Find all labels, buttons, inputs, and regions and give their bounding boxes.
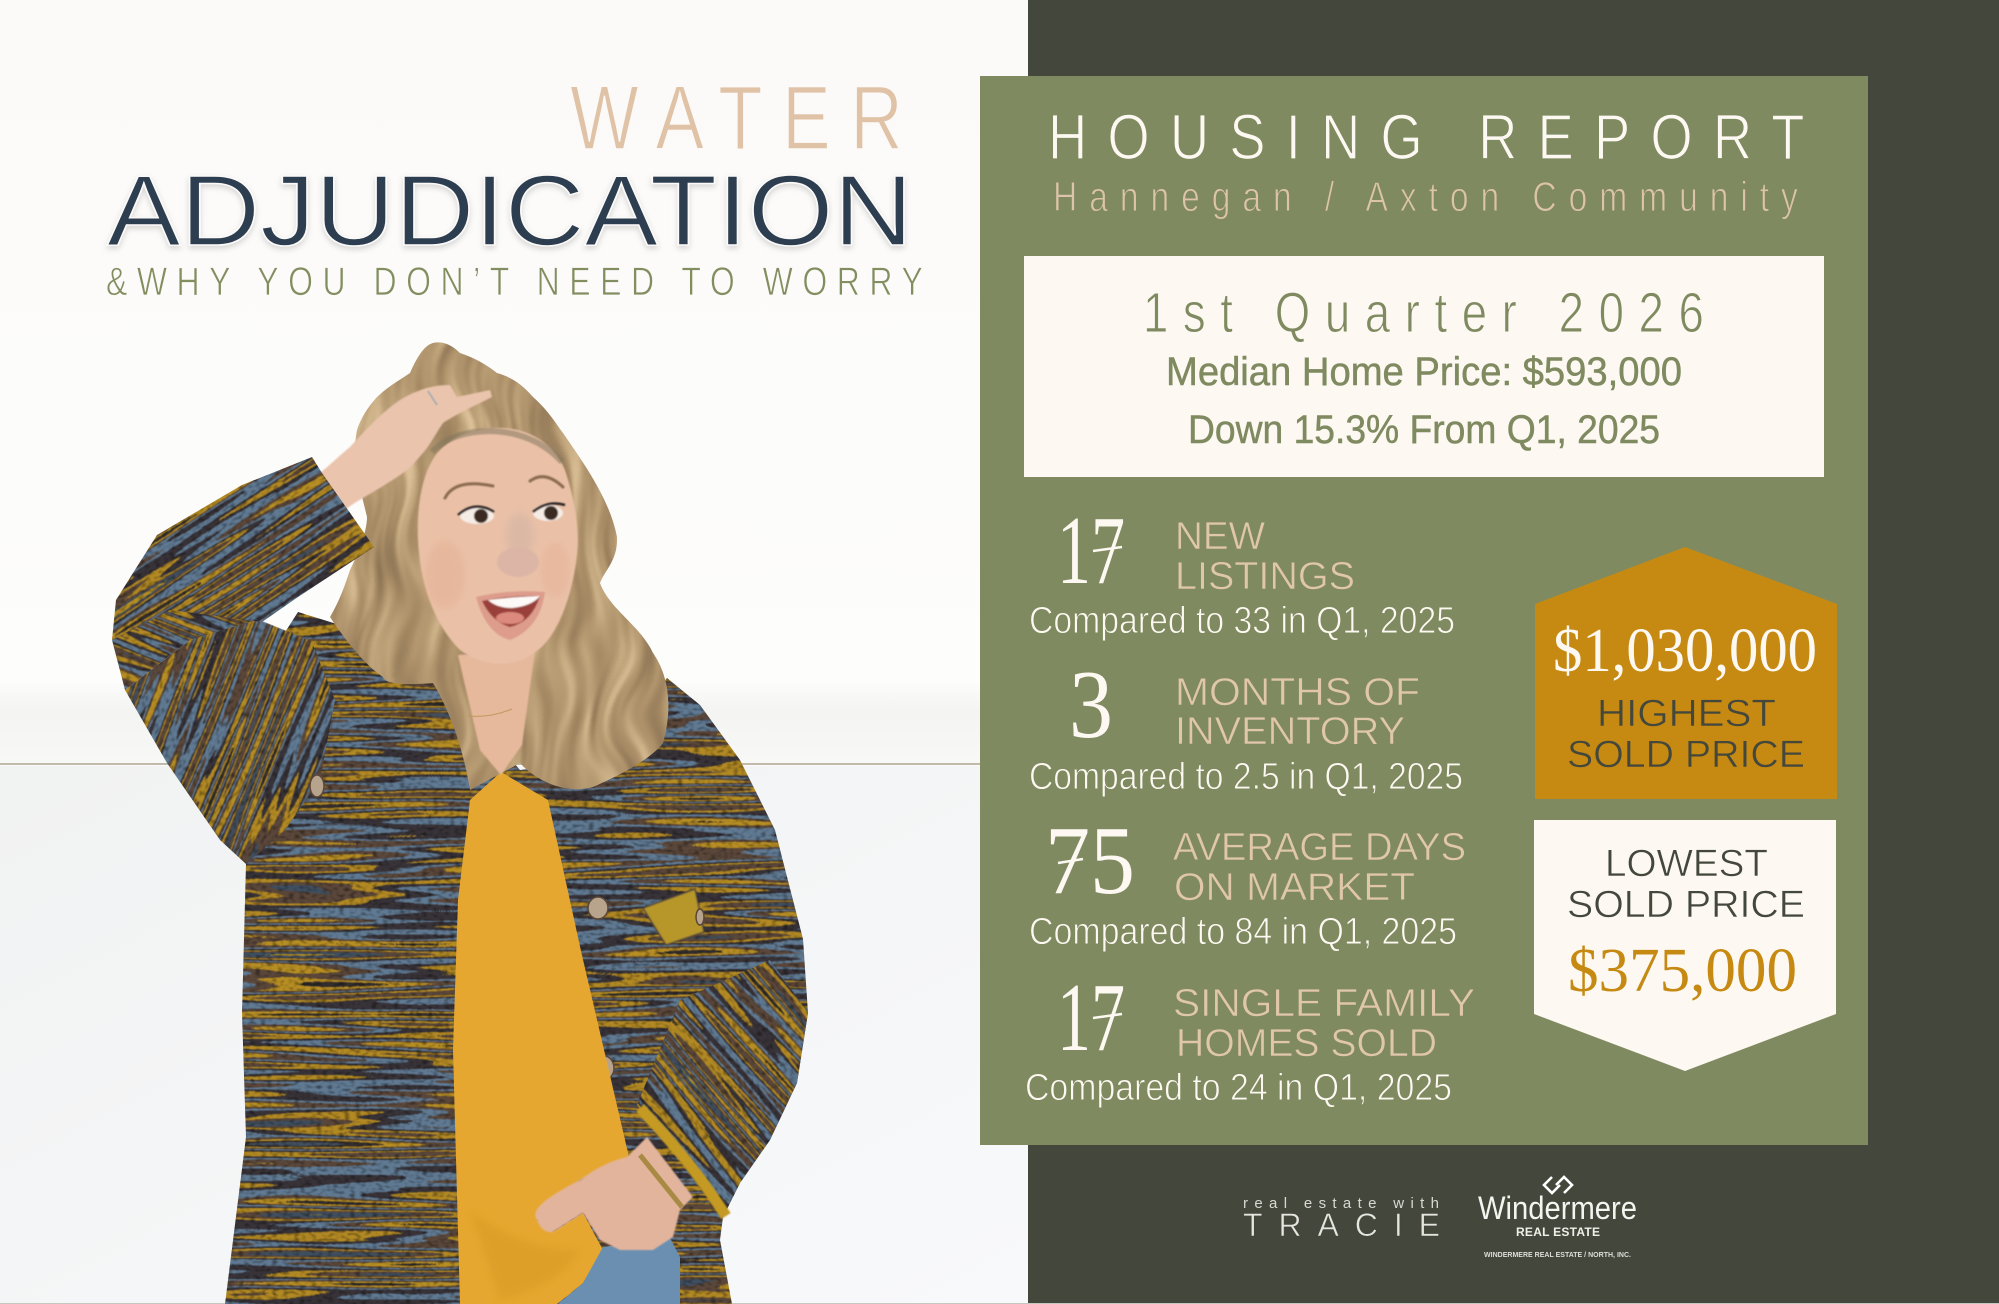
face xyxy=(418,428,578,664)
right dark background xyxy=(1028,0,1999,1304)
jacket upper sleeve xyxy=(125,620,335,864)
stat: single family homes sold: HOMES SOLD xyxy=(1176,1022,1437,1065)
yellow shirt xyxy=(453,772,629,1304)
neck and chest xyxy=(458,650,535,775)
logo: Windermere Real Estate: REAL ESTATE xyxy=(1516,1225,1600,1239)
bracelet xyxy=(640,1155,682,1207)
badge: lowest sold price: LOWEST xyxy=(1605,843,1768,885)
quarter heading: 1st Quarter 2026 xyxy=(1143,280,1704,344)
eyes xyxy=(458,504,565,524)
cheek blush xyxy=(425,513,569,609)
icon: interlocked diamonds xyxy=(1544,1177,1572,1193)
stat: single family homes sold: Compared to 24 in Q1, 2025 xyxy=(1025,1067,1452,1109)
stat: new listings: 17 xyxy=(1057,497,1125,604)
jacket forearm and cuff xyxy=(112,457,374,640)
stat: new listings: NEW xyxy=(1175,515,1265,558)
eyebrows xyxy=(445,477,563,498)
badge: lowest sold price xyxy=(1534,820,1836,1071)
stat: single family homes sold xyxy=(1025,964,1475,1109)
logo: Windermere Real Estate: WINDERMERE REAL ESTATE / NORTH, INC. xyxy=(1484,1252,1631,1259)
raised hand xyxy=(320,385,492,512)
logo: Windermere Real Estate: Windermere xyxy=(1478,1190,1637,1226)
heading: housing report: HOUSING REPORT xyxy=(1048,101,1805,173)
badge: lowest sold price: SOLD PRICE xyxy=(1567,884,1805,926)
lower hand in pocket xyxy=(535,1137,693,1250)
logo: real estate with Tracie: TRACIE xyxy=(1243,1207,1440,1243)
jeans xyxy=(558,1238,680,1304)
shirt fold shading xyxy=(470,1210,580,1300)
panel: housing report xyxy=(980,76,1868,1145)
stat: average days on market xyxy=(1029,807,1466,953)
stat: months of inventory xyxy=(1029,651,1463,798)
stat: average days on market: ON MARKET xyxy=(1174,866,1415,909)
stat: months of inventory: Compared to 2.5 in Q1, 2025 xyxy=(1029,756,1463,798)
badge: highest sold price: HIGHEST xyxy=(1597,693,1776,735)
badge: highest sold price: SOLD PRICE xyxy=(1567,734,1805,776)
left photo background xyxy=(0,0,1028,1304)
hairline shade xyxy=(432,431,562,462)
subheading: community: Hannegan / Axton Community xyxy=(1053,175,1798,221)
jacket torso xyxy=(225,612,808,1304)
buttons xyxy=(310,775,704,1080)
stat: months of inventory: 3 xyxy=(1069,651,1113,758)
subtitle: &WHY YOU DON’T NEED TO WORRY xyxy=(106,259,923,304)
ring xyxy=(428,391,437,405)
title: WATER: WATER xyxy=(570,67,903,169)
badge: lowest sold price: $375,000 xyxy=(1568,937,1797,1005)
pocket flap xyxy=(643,889,704,945)
change from last year: Down 15.3% From Q1, 2025 xyxy=(1188,408,1660,452)
stat: average days on market: 75 xyxy=(1045,807,1135,914)
stat: months of inventory: MONTHS OF xyxy=(1175,671,1420,714)
stat: average days on market: AVERAGE DAYS xyxy=(1173,826,1466,869)
stat: new listings: Compared to 33 in Q1, 2025 xyxy=(1029,600,1455,642)
title: ADJUDICATION: ADJUDICATION xyxy=(107,155,913,267)
jacket right forearm xyxy=(637,960,808,1209)
logo: Windermere Real Estate xyxy=(1478,1177,1637,1259)
stat: new listings xyxy=(1029,497,1455,642)
stat: average days on market: Compared to 84 in Q1, 2025 xyxy=(1029,911,1457,953)
right cuff band xyxy=(640,1108,726,1216)
quarter summary box xyxy=(1024,256,1824,477)
median price: Median Home Price: $593,000 xyxy=(1166,350,1682,394)
jacket elbow xyxy=(112,610,253,690)
badge: highest sold price: $1,030,000 xyxy=(1553,617,1817,685)
hair xyxy=(330,342,668,790)
badge: highest sold price xyxy=(1535,547,1837,799)
stat: months of inventory: INVENTORY xyxy=(1175,710,1405,753)
open mouth xyxy=(476,591,545,640)
stat: new listings: LISTINGS xyxy=(1175,555,1355,598)
stat: single family homes sold: SINGLE FAMILY xyxy=(1173,982,1475,1025)
logo: real estate with Tracie: real estate with xyxy=(1243,1195,1439,1212)
nose tip xyxy=(497,547,539,577)
stat: single family homes sold: 17 xyxy=(1057,964,1125,1071)
photo: woman in knit jacket xyxy=(112,342,808,1304)
